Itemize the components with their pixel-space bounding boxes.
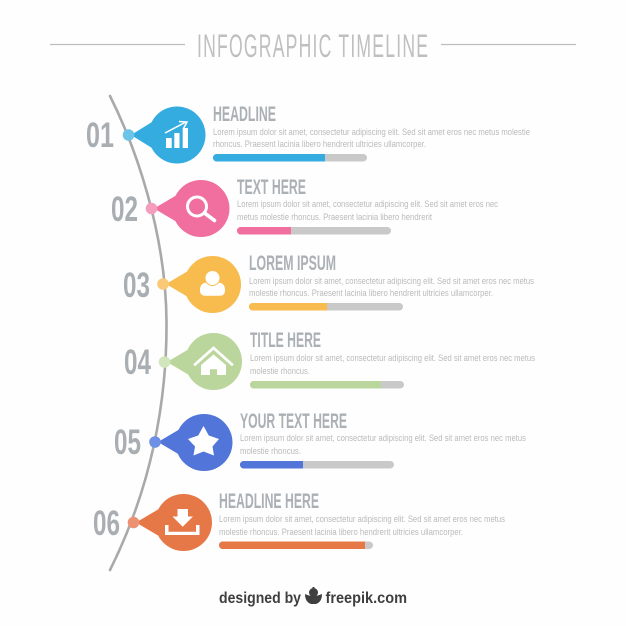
body text: rhoncus. Praesent lacinia libero hendrerit ultricies ullamcorper. [213,139,426,149]
number 01: 01 [86,116,114,155]
body text [213,127,530,149]
heading: TEXT HERE [237,176,306,199]
body text: molestie rhoncus. Praesent lacinia libero hendrerit ultricies ullamcorper. [219,527,463,537]
body text [237,199,499,222]
footer credit [219,587,407,607]
title: INFOGRAPHIC TIMELINE [197,30,428,64]
number 05: 05 [114,423,141,462]
heading: HEADLINE [213,103,276,126]
body text [249,276,535,298]
step 05 [114,410,527,471]
icon: house [195,348,232,375]
icon: star [188,426,219,456]
footer credit: freepik.com [326,590,407,607]
icon: user [200,270,225,296]
progress bar [250,381,404,388]
marker pin [123,106,206,164]
progress bar [249,303,403,310]
body text: Lorem ipsum dolor sit amet, consectetur adipiscing elit. Sed sit amet eros nec metus [249,276,535,286]
body text: Lorem ipsum dolor sit amet, consectetur adipiscing elit. Sed sit amet eros nec [237,199,499,209]
body text: Lorem ipsum dolor sit amet, consectetur adipiscing elit. Sed sit amet eros nec metus [250,353,536,363]
number 04: 04 [124,343,151,382]
body text [219,514,506,537]
body text [250,353,536,376]
number 03: 03 [123,266,150,305]
progress bar [219,542,373,549]
icon: freepik logo [305,587,322,604]
timeline curve [110,96,167,570]
body text: Lorem ipsum dolor sit amet, consectetur adipiscing elit. Sed sit amet eros nec metus molestie [213,127,530,137]
body text: molestie rhoncus. [240,446,301,456]
body text: molestie rhoncus. [250,366,310,376]
body text [240,433,527,456]
number 06: 06 [93,504,120,543]
heading: HEADLINE HERE [219,490,319,513]
body text: Lorem ipsum dolor sit amet, consectetur adipiscing elit. Sed sit amet eros nec metus [219,514,506,524]
icon: download [165,509,200,535]
body text: Lorem ipsum dolor sit amet, consectetur adipiscing elit. Sed sit amet eros nec metus [240,433,527,443]
heading: LOREM IPSUM [249,252,336,275]
body text: molestie rhoncus. Praesent lacinia libero hendrerit ultricies ullamcorper. [249,288,493,298]
marker pin [157,256,241,313]
step 01 [86,103,530,164]
footer credit: designed by [219,590,301,607]
progress bar [213,154,367,162]
heading: YOUR TEXT HERE [240,410,347,433]
marker pin [149,414,232,471]
progress bar [237,227,391,234]
step 03 [123,252,535,313]
number 02: 02 [111,190,138,229]
step 04 [124,329,536,390]
icon: magnifier [188,197,214,220]
heading: TITLE HERE [250,329,321,352]
marker pin [128,494,212,551]
body text: metus molestie rhoncus. Praesent lacinia libero hendrerit [237,212,432,222]
progress bar [240,461,394,468]
icon: bar chart with arrow [165,122,188,148]
step 06 [93,490,506,551]
step 02 [111,176,499,237]
marker pin [159,333,242,390]
marker pin [146,180,230,237]
